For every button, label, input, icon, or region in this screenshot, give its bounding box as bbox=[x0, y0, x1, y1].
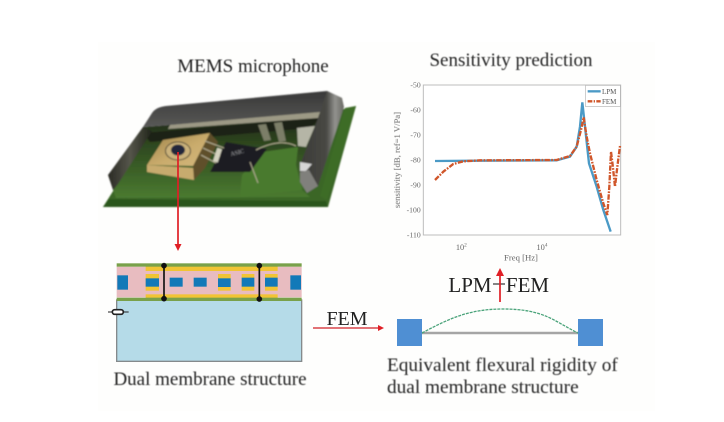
chart: sensitivity vs frequency bbox=[392, 81, 621, 262]
caption: Dual membrane structure: Dual membrane structure bbox=[113, 369, 307, 390]
y axis tick labels bbox=[407, 81, 421, 240]
side vent symbol bbox=[108, 310, 129, 314]
x axis tick labels bbox=[456, 243, 548, 252]
shield left wall bbox=[108, 127, 152, 190]
x axis tick labels: 4 bbox=[545, 243, 548, 249]
x axis tick labels: 2 bbox=[464, 243, 467, 249]
caption: Equivalent flexural rigidity bbox=[387, 355, 618, 398]
green layers bbox=[117, 263, 302, 267]
caption: Equivalent flexural rigidity: dual membrane structure bbox=[387, 377, 579, 398]
shield top cover bbox=[143, 91, 342, 127]
green centre patch bbox=[240, 147, 302, 197]
legend bbox=[586, 85, 620, 107]
label: LPM + FEM with arrow: FEM bbox=[506, 273, 549, 297]
illustration: MEMS microphone package: ASIC bbox=[230, 149, 245, 158]
substrate cavity bbox=[117, 300, 302, 361]
heading: Sensitivity prediction: Sensitivity prediction bbox=[429, 50, 593, 71]
black pillars bbox=[161, 263, 262, 302]
inner board surface bbox=[113, 113, 320, 198]
right anchor bbox=[578, 319, 603, 346]
shield right wall bbox=[300, 91, 344, 193]
arrow: microphone to membrane bbox=[174, 152, 182, 251]
label and arrow: FEM bbox=[313, 308, 384, 331]
beam bbox=[422, 332, 578, 334]
diagram: dual membrane cross section bbox=[108, 263, 302, 361]
y axis tick labels: -100 bbox=[407, 206, 421, 215]
caption: Equivalent flexural rigidity: Equivalent flexural rigidity of bbox=[387, 355, 618, 376]
y axis tick labels: -70 bbox=[410, 131, 421, 140]
circuit board bbox=[103, 106, 356, 207]
x axis tick labels: 10 bbox=[456, 243, 464, 252]
heading: MEMS microphone: MEMS microphone bbox=[177, 56, 329, 77]
LPM curve bbox=[435, 102, 611, 232]
label and arrow: FEM: FEM bbox=[326, 308, 368, 330]
legend: LPM bbox=[602, 88, 616, 96]
background panel bbox=[98, 42, 655, 411]
inner contacts bbox=[258, 124, 271, 141]
deflection curve bbox=[422, 309, 578, 333]
y axis tick labels: -110 bbox=[407, 231, 421, 240]
plot frame bbox=[423, 85, 621, 235]
x axis tick labels: 10 bbox=[536, 243, 545, 252]
yellow membranes bbox=[146, 265, 278, 271]
FEM curve bbox=[435, 117, 620, 215]
light strip under cover bbox=[168, 112, 320, 129]
y axis tick labels: -60 bbox=[410, 106, 421, 115]
y axis title: sensitivity [dB, ref=1 V/Pa] bbox=[392, 112, 402, 208]
x axis title: Freq [Hz] bbox=[504, 252, 538, 262]
legend: FEM bbox=[602, 98, 616, 106]
y axis tick labels: -50 bbox=[410, 81, 421, 90]
y axis tick labels: -90 bbox=[410, 181, 421, 190]
gold MEMS chip bbox=[147, 133, 210, 166]
left anchor bbox=[397, 319, 422, 346]
label: LPM + FEM with arrow: LPM bbox=[448, 273, 492, 297]
ASIC chip bbox=[210, 142, 267, 172]
pink layer bbox=[117, 267, 302, 297]
y axis tick labels: -80 bbox=[410, 156, 421, 165]
blue and yellow electrodes bbox=[117, 274, 301, 291]
diagram: equivalent beam bbox=[397, 309, 603, 346]
label: LPM + FEM with arrow bbox=[448, 268, 549, 302]
bond wires bbox=[201, 141, 296, 183]
illustration: MEMS microphone package bbox=[103, 91, 356, 207]
